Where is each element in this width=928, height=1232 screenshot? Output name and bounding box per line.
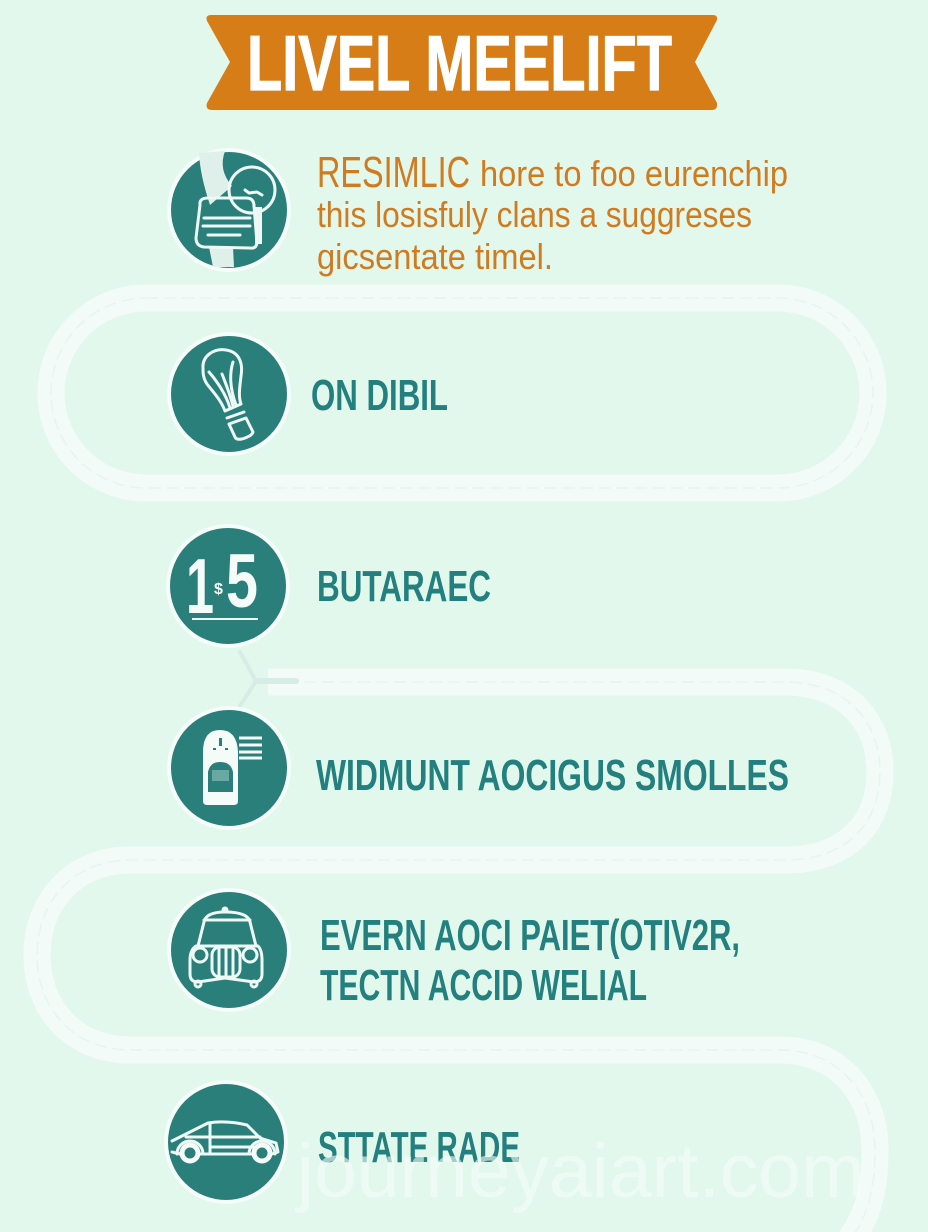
step 3: widmunt aocigus smolles [169,708,789,828]
step 5: state rade [166,1082,520,1202]
intro row [169,148,788,277]
banner ribbon [206,15,717,110]
icon: light bulb [169,334,289,454]
icon: car [166,1082,286,1202]
intro paragraph: hore to foo eurenchip [480,153,788,194]
intro paragraph: RESIMLIC [317,148,470,197]
icon: price 1$5 [168,526,288,646]
intro paragraph: this losisfuly clans a suggreses [317,194,752,235]
road junction connector [240,652,296,706]
icon: bag [169,150,289,270]
icon: vehicle top view [169,708,289,828]
intro paragraph: gicsentate timel. [317,236,553,277]
title banner [206,15,717,110]
step 2: butaraec [168,526,491,646]
label: BUTARAEC [317,562,491,611]
intro paragraph [317,148,788,277]
label: STTATE RADE [318,1123,520,1172]
road loop: upper [51,298,873,488]
title text: LIVEL MEELIFT [247,19,672,107]
label: TECTN ACCID WELIAL [320,961,647,1010]
label [320,911,740,1010]
icon: taxi front [169,890,289,1010]
label: EVERN AOCI PAIET(OTIV2R, [320,911,740,960]
icon: price 1$5: 1 [186,542,214,630]
road: winding path to the bottom [37,682,880,1232]
icon: price 1$5: 5 [226,539,258,624]
icon: price 1$5: $ [214,581,223,598]
step 1: on dibil [169,334,448,454]
watermark: journeyaiart.com [295,1129,865,1214]
step 4: evern aoci paiet [169,890,740,1010]
label: ON DIBIL [311,371,448,420]
